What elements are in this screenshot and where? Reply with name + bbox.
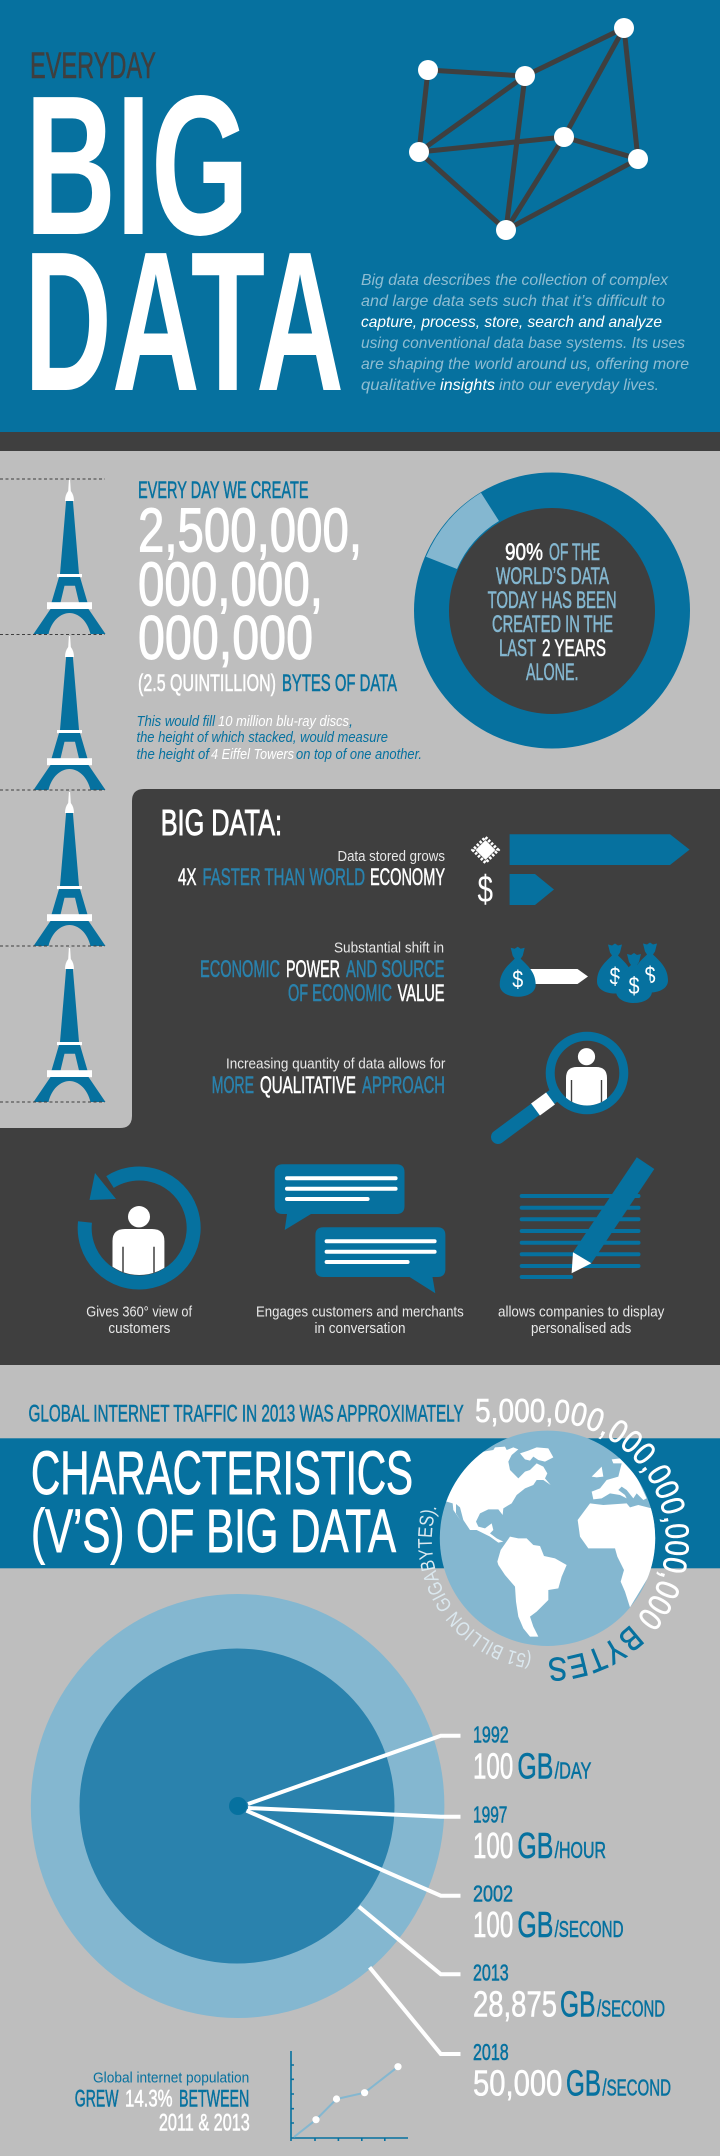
icon: conversation bubbles xyxy=(275,1164,445,1293)
label: 2018 xyxy=(473,2039,671,2104)
dark divider band xyxy=(0,432,720,451)
south america xyxy=(497,1537,567,1637)
icon: 360 degree view xyxy=(85,1173,194,1283)
caption: 360 view xyxy=(86,1304,193,1337)
icon: pencil and lines xyxy=(522,1157,654,1277)
text: qualitative approach: QUALITATIVE xyxy=(260,1072,356,1099)
text: data stored grows: FASTER THAN WORLD xyxy=(202,864,365,891)
label: 1997: /HOUR xyxy=(555,1837,606,1863)
text: internet population: GREW xyxy=(75,2086,119,2113)
text: internet population: 14.3% xyxy=(125,2086,173,2113)
label: 2002: GB xyxy=(517,1904,553,1945)
label: 2013: 28,875 xyxy=(473,1984,557,2025)
label: 2018: GB xyxy=(566,2063,601,2104)
text: internet population: BETWEEN xyxy=(179,2086,249,2113)
arctic islands xyxy=(520,1447,553,1462)
label: 1992: 1992 xyxy=(473,1721,509,1747)
heading: everyday: EVERYDAY xyxy=(30,45,156,86)
donut text: TODAY HAS BEEN xyxy=(488,587,617,614)
heading: every day we create: EVERY DAY WE CREATE xyxy=(138,477,308,504)
text: data stored grows: Data stored grows xyxy=(338,848,445,865)
blu-ray note: the height of which stacked, would measure xyxy=(136,730,388,746)
donut text: WORLD’S DATA xyxy=(496,563,609,590)
panel: characteristics band xyxy=(0,1438,720,1568)
blu-ray note: 10 million blu-ray discs xyxy=(218,714,349,730)
label: 1992: /DAY xyxy=(555,1757,591,1783)
caption: personalised ads: personalised ads xyxy=(531,1320,631,1337)
text: qualitative approach: Increasing quantity of data allows for xyxy=(226,1056,445,1072)
circle chart: data growth xyxy=(31,1594,461,2054)
big number: 000,000, xyxy=(138,550,323,620)
donut text: 2 YEARS xyxy=(542,635,606,662)
caption: personalised ads: allows companies to display xyxy=(498,1304,665,1321)
text: economic power: OF ECONOMIC xyxy=(288,980,392,1007)
donut text: LAST xyxy=(499,635,536,662)
label: 2013: 2013 xyxy=(473,1960,509,1986)
africa xyxy=(578,1503,660,1607)
label: 1992: 100 xyxy=(473,1745,513,1786)
icon: microchip xyxy=(473,837,498,863)
text: global internet traffic: GLOBAL INTERNET TRAFFIC IN 2013 WAS APPROXIMATELY xyxy=(28,1401,464,1428)
british isles xyxy=(592,1467,603,1477)
text: internet population xyxy=(75,2070,250,2137)
heading: characteristics: CHARACTERISTICS xyxy=(31,1439,413,1507)
quintillion bytes label: (2.5 QUINTILLION) xyxy=(138,670,276,697)
text: data stored grows: 4X xyxy=(178,864,196,891)
label: 2002: 2002 xyxy=(473,1881,513,1907)
label: 1997 xyxy=(473,1802,606,1866)
text: data stored grows: ECONOMY xyxy=(370,864,445,891)
caption: personalised ads xyxy=(498,1304,665,1337)
label: 1992: GB xyxy=(517,1745,553,1786)
leader lines xyxy=(246,1736,460,2054)
heading: v's of big data: (V’S) OF BIG DATA xyxy=(31,1497,396,1565)
blu-ray note: , xyxy=(349,714,353,730)
caption: 360 view: customers xyxy=(108,1320,170,1337)
icon: money bags shift xyxy=(500,942,668,1003)
icon: magnifier with person xyxy=(498,1036,624,1137)
text: economic power: Substantial shift in xyxy=(334,940,444,957)
intro paragraph: Big data describes the collection of complex xyxy=(361,272,669,289)
icon: globe xyxy=(435,1431,660,1646)
label: 1997: 1997 xyxy=(473,1802,507,1828)
big number: 2,500,000, xyxy=(138,496,362,566)
caption: 360 view: Gives 360° view of xyxy=(86,1304,193,1321)
label: 2018: /SECOND xyxy=(602,2075,671,2101)
curved text: bytes: 5,000,000,000,000,000,000 BYTES xyxy=(476,1398,690,1681)
panel: dark big data panel xyxy=(0,789,720,1365)
text: qualitative approach xyxy=(212,1056,445,1099)
big number: 000,000 xyxy=(138,604,313,673)
text: economic power: POWER xyxy=(286,956,340,983)
label: 1992 xyxy=(473,1721,591,1786)
donut text xyxy=(488,539,617,686)
label: 2002: 100 xyxy=(473,1904,513,1945)
north america xyxy=(435,1447,551,1543)
blu-ray note xyxy=(136,714,422,763)
label: 2018: 2018 xyxy=(473,2039,509,2065)
label: 1997: 100 xyxy=(473,1825,513,1866)
quintillion bytes label: BYTES OF DATA xyxy=(282,670,397,697)
text: internet population: 2011 & 2013 xyxy=(159,2110,250,2137)
eiffel tower stack xyxy=(0,479,106,1102)
text: economic power: AND SOURCE xyxy=(346,956,444,983)
title: data: DATA xyxy=(24,211,344,433)
blu-ray note: the height of xyxy=(136,747,211,763)
text: qualitative approach: MORE xyxy=(212,1072,254,1099)
text: economic power xyxy=(200,940,445,1007)
intro paragraph: qualitative xyxy=(361,377,436,394)
label: 2002: /SECOND xyxy=(555,1916,624,1942)
intro paragraph: are shaping the world around us, offering more xyxy=(361,356,689,373)
heading: big data: BIG DATA: xyxy=(161,802,282,843)
icon: dollar: $ xyxy=(478,869,493,911)
intro paragraph: into our everyday lives. xyxy=(499,377,659,394)
label: 1997: GB xyxy=(517,1825,553,1866)
curved text: gigabytes: (51 BILLION GIGABYTES). xyxy=(418,1508,530,1669)
caption: conversation: in conversation xyxy=(314,1320,406,1337)
blu-ray note: on top of one another. xyxy=(296,747,422,763)
donut text: ALONE. xyxy=(526,659,578,686)
caption: conversation: Engages customers and merchants xyxy=(256,1304,464,1321)
donut text: CREATED IN THE xyxy=(492,611,613,638)
label: 2002 xyxy=(473,1881,624,1945)
bar: data growth xyxy=(510,834,690,865)
blu-ray note: This would fill xyxy=(136,714,216,730)
line chart: internet population xyxy=(291,2051,408,2141)
label: 2013 xyxy=(473,1960,665,2025)
text: economic power: ECONOMIC xyxy=(200,956,280,983)
blu-ray note: 4 Eiffel Towers xyxy=(211,747,294,763)
bar: economy growth xyxy=(510,874,554,905)
text: qualitative approach: APPROACH xyxy=(362,1072,445,1099)
label: 2013: GB xyxy=(560,1984,596,2025)
donut text: OF THE xyxy=(549,539,600,566)
network graph icon xyxy=(409,18,648,240)
donut text: 90% xyxy=(505,539,543,566)
intro paragraph: and large data sets such that it’s difficult to xyxy=(361,293,665,310)
text: internet population: Global internet population xyxy=(93,2070,249,2087)
text: economic power: VALUE xyxy=(398,980,445,1007)
caption: conversation xyxy=(256,1304,464,1337)
donut chart: 90 percent xyxy=(414,472,690,748)
label: 2013: /SECOND xyxy=(597,1996,665,2022)
label: 2018: 50,000 xyxy=(473,2063,562,2104)
panel: hero header xyxy=(0,0,720,433)
intro paragraph: insights xyxy=(440,377,495,394)
intro paragraph: capture, process, store, search and analyze xyxy=(361,314,662,331)
big number xyxy=(138,496,362,673)
intro paragraph: using conventional data base systems. Its uses xyxy=(361,335,685,352)
text: data stored grows xyxy=(178,848,445,891)
intro paragraph xyxy=(361,272,689,394)
europe xyxy=(592,1458,647,1500)
title: big: BIG xyxy=(25,55,249,277)
